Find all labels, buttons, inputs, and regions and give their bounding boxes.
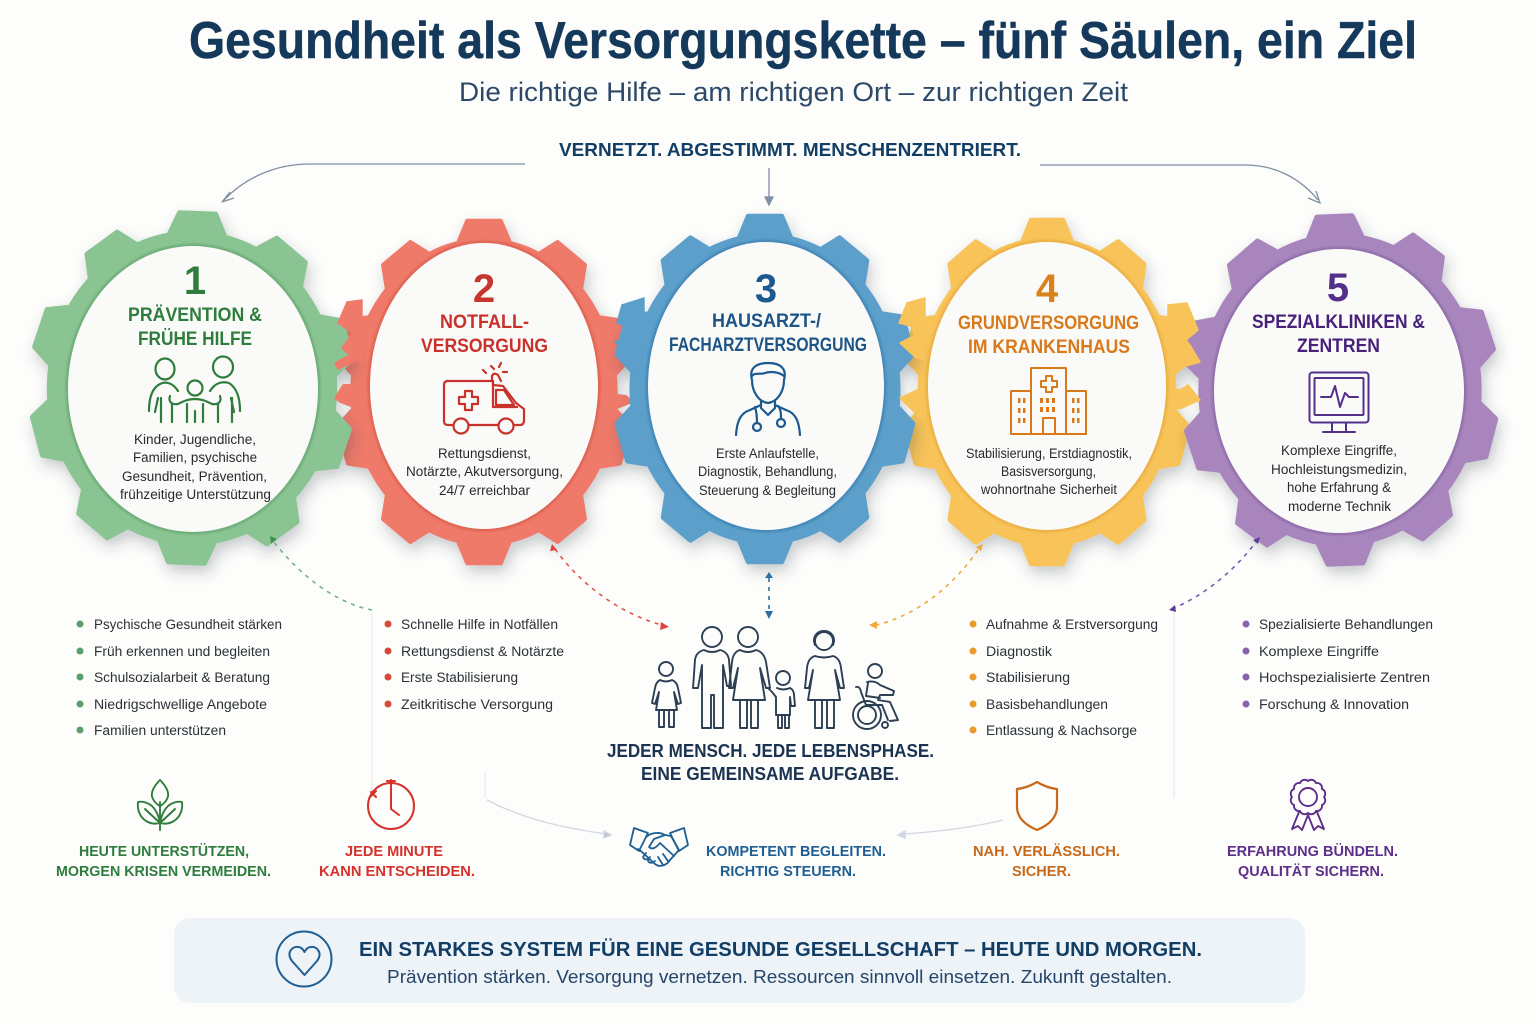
text gear 1: Gesundheit, Prävention, xyxy=(122,469,267,484)
gear 5 purple xyxy=(1177,210,1503,570)
text gear 4: Stabilisierung, Erstdiagnostik, xyxy=(966,446,1132,461)
panel: gear 2 face xyxy=(368,240,600,532)
heading gear 5: SPEZIALKLINIKEN & xyxy=(1252,312,1425,333)
icon: ambulance xyxy=(444,363,524,434)
list: specialist: Spezialisierte Behandlungen xyxy=(1259,617,1433,632)
list: specialist: Forschung & Innovation xyxy=(1259,697,1409,712)
list: prevention: Früh erkennen und begleiten xyxy=(94,644,270,659)
icon: hospital windows xyxy=(1018,398,1080,423)
text gear 2: 24/7 erreichbar xyxy=(439,483,530,498)
text gear 3: Steuerung & Begleitung xyxy=(699,483,836,498)
text gear 3: Erste Anlaufstelle, xyxy=(716,446,819,461)
heading gear 4: GRUNDVERSORGUNG xyxy=(958,313,1139,334)
number 2: 2 xyxy=(473,267,495,311)
icon: monitor xyxy=(1310,372,1368,432)
claim: hospital: SICHER. xyxy=(1012,864,1071,880)
heading gear 5: ZENTREN xyxy=(1297,336,1380,357)
heading gear 3 xyxy=(669,311,867,356)
number 1: 1 xyxy=(184,259,206,303)
number 5: 5 xyxy=(1327,266,1349,310)
text gear 2: Rettungsdienst, xyxy=(438,446,531,461)
footer heading: EIN STARKES SYSTEM FÜR EINE GESUNDE GESELLSCHAFT – HEUTE UND MORGEN. xyxy=(359,938,1202,961)
panel: gear 4 face xyxy=(926,240,1168,532)
list: emergency xyxy=(384,617,564,712)
number 3: 3 xyxy=(755,267,777,311)
interlocking teeth xyxy=(335,298,1200,420)
arrows: network to gears xyxy=(222,164,1320,205)
claim: primary care: KOMPETENT BEGLEITEN. xyxy=(706,844,886,860)
center slogan xyxy=(607,741,934,784)
center slogan: JEDER MENSCH. JEDE LEBENSPHASE. xyxy=(607,741,934,761)
claim: hospital: NAH. VERLÄSSLICH. xyxy=(973,843,1120,860)
icon: clock xyxy=(368,780,414,829)
list: emergency: Zeitkritische Versorgung xyxy=(401,697,553,712)
text gear 4 xyxy=(966,446,1132,497)
gear 3 blue xyxy=(614,216,916,562)
panel: gear 3 face xyxy=(646,240,886,532)
claim: specialist: QUALITÄT SICHERN. xyxy=(1238,863,1384,880)
list: prevention: Niedrigschwellige Angebote xyxy=(94,697,267,712)
list: hospital: Aufnahme & Erstversorgung xyxy=(986,617,1158,632)
text gear 5 xyxy=(1271,443,1407,514)
stubs of red gear xyxy=(608,352,632,410)
heading gear 2 xyxy=(421,312,548,357)
icon: handshake xyxy=(630,828,688,866)
list: prevention: Familien unterstützen xyxy=(94,723,226,738)
text gear 3: Diagnostik, Behandlung, xyxy=(698,464,837,479)
panel: footer xyxy=(174,918,1305,1003)
list: prevention: Schulsozialarbeit & Beratung xyxy=(94,670,270,685)
heading gear 4 xyxy=(958,313,1139,358)
heading gear 3: HAUSARZT-/ xyxy=(712,311,822,332)
text gear 1: Familien, psychische xyxy=(133,450,257,465)
list: specialist: Hochspezialisierte Zentren xyxy=(1259,670,1430,685)
claim: primary care: RICHTIG STEUERN. xyxy=(720,864,856,880)
center slogan: EINE GEMEINSAME AUFGABE. xyxy=(641,764,899,784)
panel: gear 5 face xyxy=(1212,246,1466,536)
claim: prevention: MORGEN KRISEN VERMEIDEN. xyxy=(56,864,271,880)
text gear 1: frühzeitige Unterstützung xyxy=(120,487,271,502)
list: emergency: Erste Stabilisierung xyxy=(401,670,518,685)
icon: people of all ages xyxy=(652,627,898,729)
icon: leaves xyxy=(138,780,182,830)
claim: prevention: HEUTE UNTERSTÜTZEN, xyxy=(79,843,249,860)
subtitle: Die richtige Hilfe – am richtigen Ort – zur richtigen Zeit xyxy=(459,77,1129,107)
claim: primary care xyxy=(706,844,886,880)
claim: specialist xyxy=(1227,843,1398,880)
dashed arrows to gears xyxy=(273,541,1256,625)
text gear 5: hohe Erfahrung & xyxy=(1287,480,1391,495)
heading gear 2: VERSORGUNG xyxy=(421,336,548,357)
list: hospital: Stabilisierung xyxy=(986,670,1070,685)
heading gear 5 xyxy=(1252,312,1425,357)
heading gear 1: PRÄVENTION & xyxy=(128,305,262,326)
gear 1 green xyxy=(25,207,359,569)
claim: emergency xyxy=(319,844,475,880)
faint arrows to handshake xyxy=(487,800,1003,838)
panel: gear 1 face xyxy=(66,244,320,534)
text gear 1: Kinder, Jugendliche, xyxy=(134,432,256,447)
icon: heart xyxy=(276,932,332,986)
network heading: VERNETZT. ABGESTIMMT. MENSCHENZENTRIERT. xyxy=(559,140,1021,160)
list: emergency: Schnelle Hilfe in Notfällen xyxy=(401,617,558,632)
icon: shield xyxy=(1017,782,1057,830)
text gear 3 xyxy=(698,446,837,498)
text gear 2: Notärzte, Akutversorgung, xyxy=(406,464,563,479)
dashed arrow heads xyxy=(270,536,1260,630)
text gear 5: moderne Technik xyxy=(1288,499,1391,514)
claim: hospital xyxy=(973,843,1120,880)
icon: hospital xyxy=(1011,368,1086,434)
faint vertical connectors xyxy=(372,612,1174,798)
gear 2 red xyxy=(335,221,633,563)
text gear 5: Komplexe Eingriffe, xyxy=(1281,443,1397,458)
heading gear 1 xyxy=(128,305,262,350)
list: hospital xyxy=(970,617,1158,738)
claim: emergency: KANN ENTSCHEIDEN. xyxy=(319,864,475,880)
gear 4 yellow xyxy=(903,220,1191,564)
text gear 2 xyxy=(406,446,563,498)
list: prevention: Psychische Gesundheit stärken xyxy=(94,617,282,632)
title: Gesundheit als Versorgungskette – fünf Säulen, ein Ziel xyxy=(189,12,1417,70)
heading gear 4: IM KRANKENHAUS xyxy=(968,337,1130,358)
list: hospital: Diagnostik xyxy=(986,644,1052,659)
list: specialist: Komplexe Eingriffe xyxy=(1259,644,1379,659)
icon: doctor xyxy=(736,363,800,435)
list: hospital: Basisbehandlungen xyxy=(986,697,1108,712)
list: specialist xyxy=(1242,617,1433,712)
list: hospital: Entlassung & Nachsorge xyxy=(986,723,1137,738)
text gear 4: wohnortnahe Sicherheit xyxy=(980,482,1117,497)
text gear 1 xyxy=(120,432,271,502)
list: emergency: Rettungsdienst & Notärzte xyxy=(401,644,564,659)
icon: family xyxy=(149,356,240,422)
claim: emergency: JEDE MINUTE xyxy=(345,844,443,860)
icon: rosette xyxy=(1291,780,1325,830)
heading gear 1: FRÜHE HILFE xyxy=(138,329,252,350)
list: prevention xyxy=(76,617,282,738)
claim: prevention xyxy=(56,843,271,880)
claim: specialist: ERFAHRUNG BÜNDELN. xyxy=(1227,843,1398,860)
heading gear 2: NOTFALL- xyxy=(440,312,529,333)
text gear 4: Basisversorgung, xyxy=(1001,464,1096,479)
text gear 5: Hochleistungsmedizin, xyxy=(1271,462,1407,477)
footer text: Prävention stärken. Versorgung vernetzen. Ressourcen sinnvoll einsetzen. Zukunft gestalten. xyxy=(387,967,1172,987)
heading gear 3: FACHARZTVERSORGUNG xyxy=(669,335,867,356)
number 4: 4 xyxy=(1036,267,1059,311)
